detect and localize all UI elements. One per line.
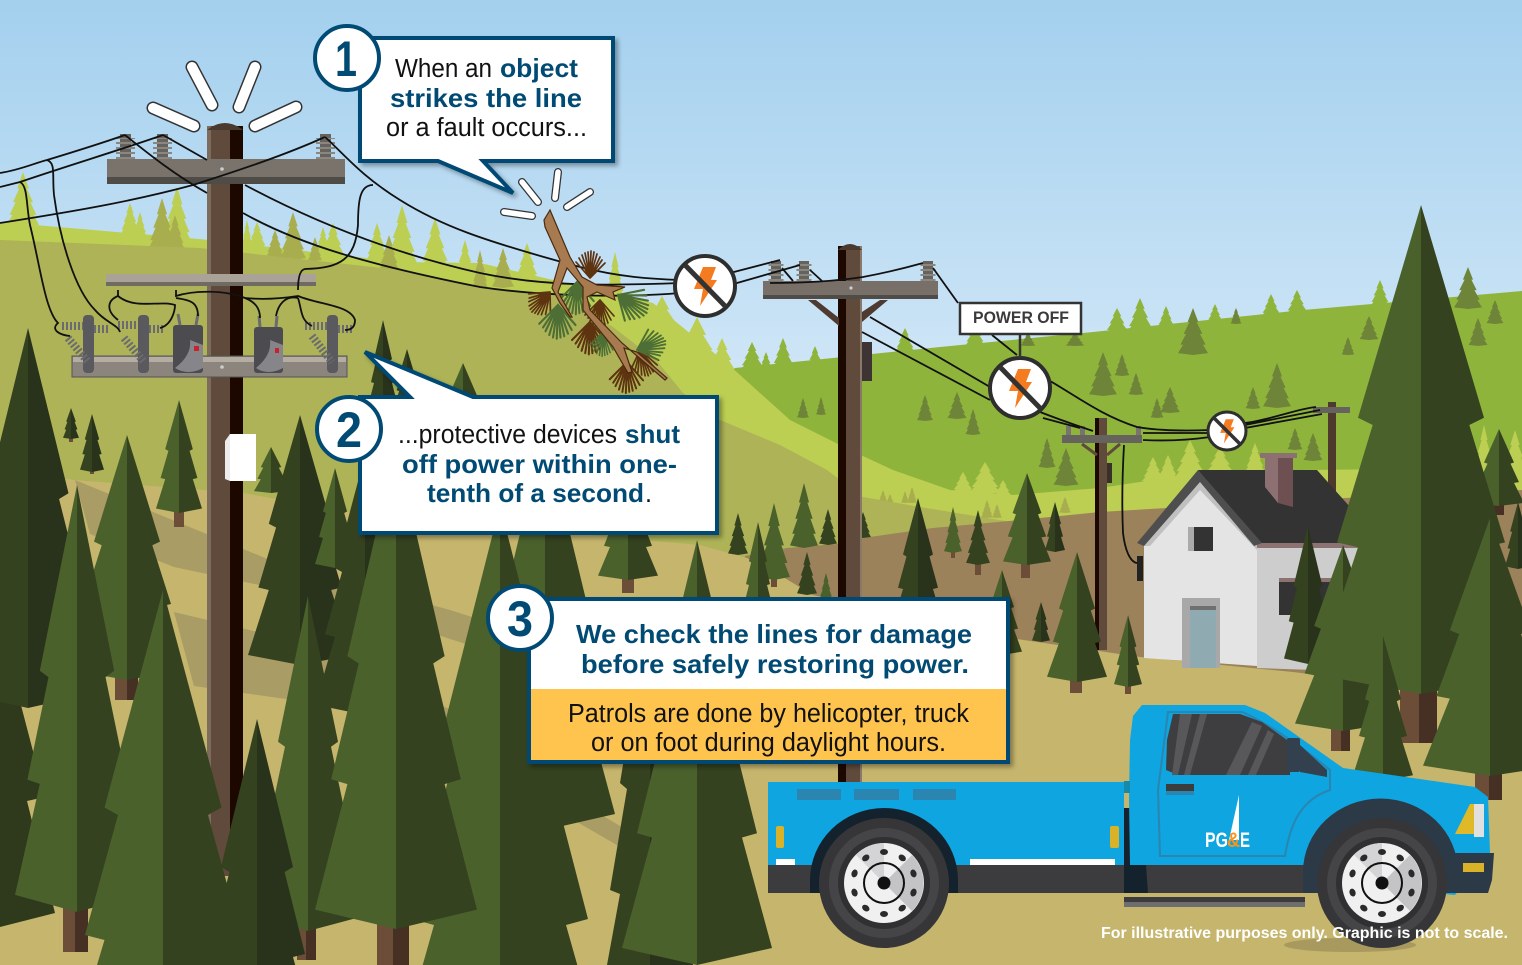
door handle: [1166, 784, 1194, 795]
PG&E logo: E: [1240, 829, 1250, 852]
lime hills with conifers: [0, 172, 1522, 620]
power off sign: [960, 303, 1081, 358]
mid brown hill: [745, 490, 1522, 760]
power off sign: POWER OFF: [973, 308, 1069, 327]
large background conifers: [0, 328, 658, 927]
callout 2 text: [398, 419, 680, 508]
impact spark marks: [504, 172, 590, 216]
running board: [1124, 897, 1305, 907]
side mirror: [1287, 738, 1300, 772]
callout 2 text: off power within one-: [402, 449, 677, 479]
yellow patrol band: [531, 689, 1006, 760]
number badge 1: [315, 26, 379, 90]
number badge 3: 3: [507, 591, 533, 647]
pole-top spark marks: [153, 67, 296, 126]
pole mounted white box: [225, 434, 256, 481]
front bumper and lights: [1448, 804, 1494, 893]
callout 1 text: object: [500, 53, 578, 83]
cutouts: [62, 315, 352, 373]
number badge 1: 1: [335, 31, 357, 87]
PG&E service truck: [768, 705, 1494, 952]
utility pole 3: [1062, 418, 1143, 650]
truck bed: [768, 782, 1124, 893]
overhead power lines: [0, 135, 1322, 563]
lower equipment platform: [72, 356, 347, 377]
callout 1 text: or a fault occurs...: [386, 114, 587, 142]
callout 2 text: .: [645, 480, 652, 508]
PG&E logo: [1205, 795, 1250, 852]
fallen pine branch striking the line: [521, 210, 671, 393]
callout 2: protective devices: [317, 352, 717, 533]
wheel arches: [810, 799, 1458, 893]
icon: power-off disc 2: [990, 358, 1050, 418]
mid-ground trees near house and right side: [1047, 205, 1522, 800]
icon: power-off disc 3: [1208, 412, 1246, 450]
transformers: [173, 314, 283, 373]
callout 1: object strikes the line: [315, 26, 613, 193]
PG&E logo: PG: [1205, 829, 1228, 852]
front wheel: [1317, 818, 1447, 948]
callout 3 heading: [576, 619, 972, 679]
far green hill: [700, 267, 1522, 540]
pole 1 shaft: [207, 123, 243, 876]
callout 3 body: [568, 700, 969, 757]
icon: power-off disc 1: [675, 256, 735, 316]
small conifers on left slope: [63, 320, 488, 527]
house: [1137, 453, 1375, 672]
back trees on mid hill: [728, 473, 1065, 655]
callout 2 text: ...protective devices: [398, 421, 617, 449]
callout 3: patrols before restoring power: [488, 586, 1008, 762]
middle crossarm: [106, 274, 316, 286]
ground shadow: [1284, 938, 1416, 952]
disclaimer note: For illustrative purposes only. Graphic is not to scale.: [1101, 925, 1508, 942]
callout 1 text: [386, 53, 587, 142]
callout 3 heading: before safely restoring power.: [581, 649, 969, 679]
pine needle tufts: [521, 251, 671, 393]
callout 2 text: shut: [625, 419, 680, 449]
jumper wires: [20, 160, 373, 336]
cab window: [1166, 714, 1290, 775]
callout 1 text: strikes the line: [390, 83, 582, 113]
tan foreground ground: [0, 470, 1522, 965]
top crossarm with insulators: [107, 134, 345, 184]
callout 3 heading: We check the lines for damage: [576, 619, 972, 649]
utility pole 1 with equipment: [20, 123, 373, 876]
callout 3 body: or on foot during daylight hours.: [591, 729, 946, 757]
callout 3 body: Patrols are done by helicopter, truck: [568, 700, 969, 728]
cab: [1124, 705, 1490, 895]
callout 2 text: tenth of a second: [427, 478, 644, 508]
PG&E logo: &: [1227, 829, 1240, 852]
sky background: [0, 0, 1522, 400]
foreground conifers: [15, 446, 772, 965]
rear wheel: [819, 818, 949, 948]
number badge 2: [317, 397, 381, 461]
callout 1 text: When an: [395, 55, 492, 83]
utility pole 4: [1313, 402, 1350, 502]
number badge 2: 2: [336, 402, 362, 458]
ground shadow bands: [75, 480, 700, 870]
utility pole 2 with crossarm: [763, 244, 938, 786]
number badge 3: [488, 586, 552, 650]
